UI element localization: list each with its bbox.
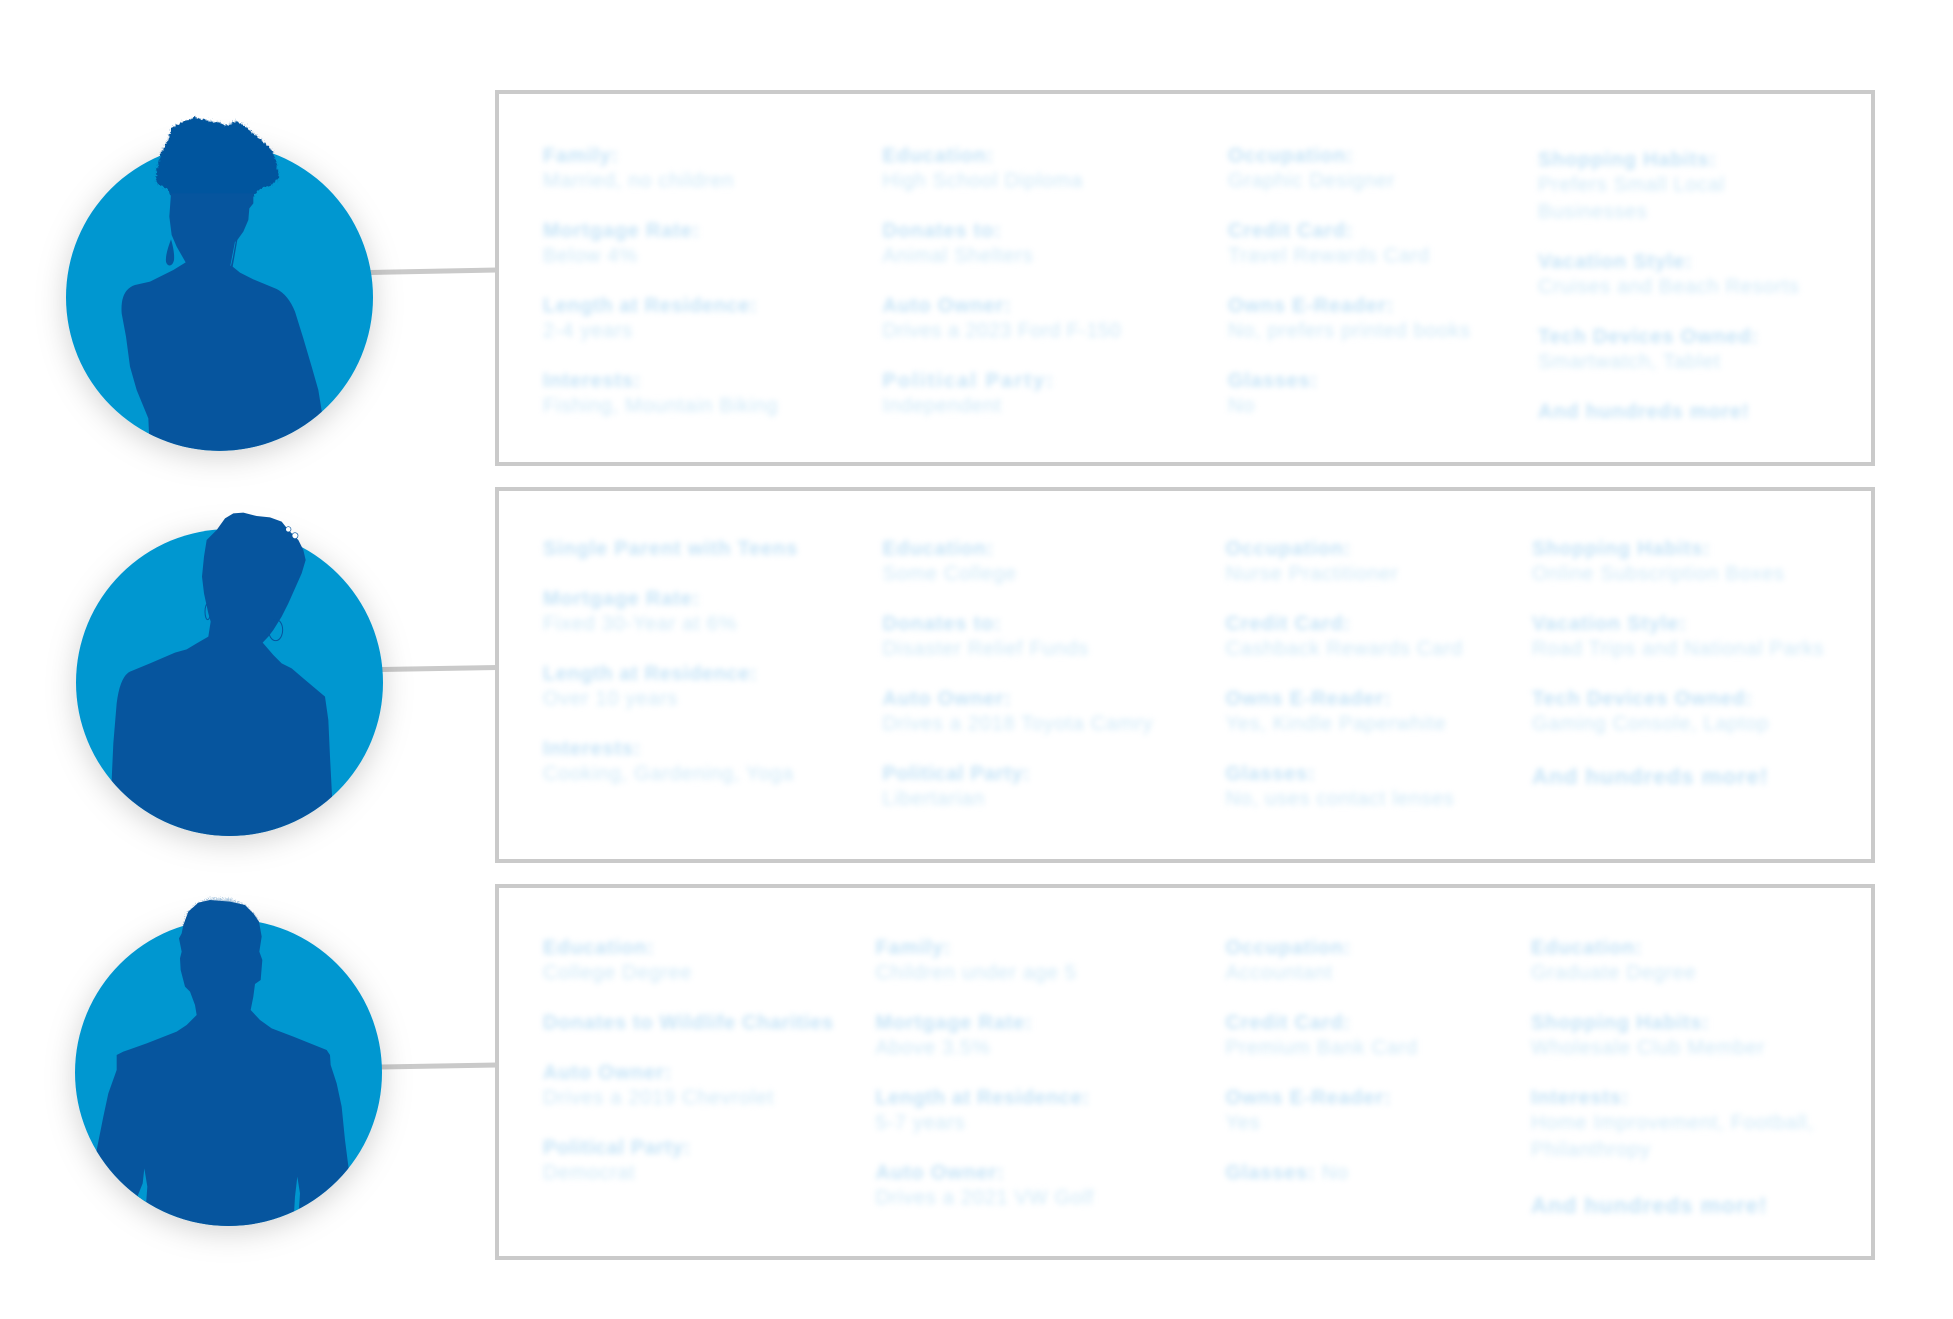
text column: profile 1 education and giving: Animal Shelters — [882, 245, 1033, 267]
text column: profile 3 household — [874, 937, 1094, 1209]
text column: profile 2 household: Cooking, Gardening, Yoga — [543, 763, 794, 785]
text column: profile 2 education and giving — [881, 538, 1153, 810]
connector line: profile 3 — [380, 1065, 497, 1067]
text column: profile 1 education and giving: Drives a 2023 Ford F-150 — [882, 320, 1121, 342]
text column: profile 1 education and giving: Auto Owner: — [882, 295, 1012, 317]
text column: profile 2 lifestyle: Road Trips and National Parks — [1532, 638, 1824, 660]
text column: profile 1 household: Below 4% — [543, 245, 638, 267]
portrait 1: woman with curly updo — [66, 117, 373, 463]
text column: profile 2 occupation: No, uses contact lenses — [1226, 788, 1454, 810]
text column: profile 1 household: Family: — [543, 145, 619, 167]
text column: profile 1 occupation: No, prefers printed books — [1228, 320, 1471, 342]
text column: profile 1 household: Married, no children — [543, 170, 734, 192]
text column: profile 1 education and giving: Education: — [882, 145, 994, 167]
text column: profile 3 lifestyle: Home Improvement, Football, — [1531, 1112, 1814, 1134]
text column: profile 3 occupation: Accountant — [1226, 962, 1333, 984]
text column: profile 3 lifestyle: Wholesale Club Member — [1531, 1037, 1765, 1059]
text column: profile 3 occupation: Premium Bank Card — [1226, 1037, 1418, 1059]
text column: profile 1 lifestyle: Shopping Habits: — [1538, 149, 1717, 171]
text column: profile 3 occupation: Owns E-Reader: — [1226, 1087, 1391, 1109]
text column: profile 1 household — [542, 145, 778, 417]
text column: profile 1 lifestyle: And hundreds more! — [1538, 401, 1749, 423]
text column: profile 2 education and giving: Some College — [882, 563, 1017, 585]
connector line: profile 1 — [370, 270, 497, 272]
text column: profile 3 education and giving: Auto Owner: — [543, 1062, 672, 1084]
text column: profile 2 education and giving: Education: — [882, 538, 994, 560]
text column: profile 3 occupation: Glasses: No — [1226, 1162, 1349, 1184]
text column: profile 2 occupation — [1224, 538, 1463, 810]
text column: profile 2 household: Fixed 30-Year at 6% — [543, 613, 737, 635]
text column: profile 2 household: Interests: — [543, 738, 641, 760]
text column: profile 2 lifestyle: Tech Devices Owned: — [1532, 688, 1753, 710]
text column: profile 3 education and giving: Donates to Wildlife Charities — [543, 1012, 834, 1034]
text column: profile 2 occupation: Nurse Practitioner — [1226, 563, 1399, 585]
text column: profile 3 occupation: Yes — [1226, 1112, 1260, 1134]
text column: profile 3 household: Children under age 5 — [876, 962, 1077, 984]
text column: profile 3 education and giving — [542, 937, 834, 1184]
text column: profile 2 occupation: Glasses: — [1226, 763, 1315, 785]
text column: profile 3 household: Length at Residence: — [876, 1087, 1090, 1109]
text column: profile 2 occupation: Yes, Kindle Paperwhite — [1226, 713, 1446, 735]
text column: profile 3 lifestyle: Shopping Habits: — [1531, 1012, 1710, 1034]
text column: profile 2 occupation: Credit Card: — [1226, 613, 1351, 635]
text column: profile 3 lifestyle: Philanthropy — [1531, 1139, 1651, 1161]
text column: profile 3 household: 5-7 years — [876, 1112, 965, 1134]
text column: profile 1 education and giving: Independent — [882, 395, 1002, 417]
text column: profile 2 education and giving: Auto Owner: — [882, 688, 1012, 710]
text column: profile 2 education and giving: Donates to: — [882, 613, 1002, 635]
text column: profile 1 occupation: Travel Rewards Card — [1228, 245, 1430, 267]
text column: profile 2 lifestyle: And hundreds more! — [1532, 764, 1768, 789]
text column: profile 3 lifestyle: Graduate Degree — [1531, 962, 1696, 984]
text column: profile 3 household: Above 3.5% — [876, 1037, 991, 1059]
text column: profile 1 occupation: No — [1228, 395, 1255, 417]
text column: profile 1 household: Mortgage Rate: — [543, 220, 700, 242]
text column: profile 2 occupation: Owns E-Reader: — [1226, 688, 1391, 710]
text column: profile 2 occupation: Cashback Rewards Card — [1226, 638, 1463, 660]
text column: profile 1 household: Fishing, Mountain Biking — [543, 395, 778, 417]
text column: profile 3 education and giving: Democrat — [543, 1162, 635, 1184]
portrait 3: man in suit jacket — [75, 898, 382, 1253]
text column: profile 2 household: Length at Residence: — [543, 663, 757, 685]
text column: profile 1 education and giving: Political Party: — [882, 370, 1055, 392]
text column: profile 1 occupation: Owns E-Reader: — [1228, 295, 1394, 317]
text column: profile 3 household: Auto Owner: — [876, 1162, 1005, 1184]
text column: profile 2 education and giving: Drives a 2018 Toyota Camry — [882, 713, 1153, 735]
text column: profile 1 lifestyle: Tech Devices Owned: — [1538, 326, 1759, 348]
text column: profile 1 lifestyle: Prefers Small Local — [1538, 174, 1725, 196]
text column: profile 1 education and giving: High School Diploma — [882, 170, 1083, 192]
text column: profile 1 lifestyle: Businesses — [1538, 201, 1647, 223]
text column: profile 1 lifestyle: Cruises and Beach Resorts — [1538, 276, 1799, 298]
text column: profile 3 household: Drives a 2021 VW Golf — [876, 1187, 1094, 1209]
text column: profile 1 occupation: Glasses: — [1228, 370, 1318, 392]
text column: profile 3 occupation — [1224, 937, 1418, 1184]
text column: profile 2 lifestyle — [1531, 538, 1824, 789]
text column: profile 1 education and giving — [881, 145, 1122, 417]
panel: profile 1 attributes — [495, 90, 1875, 466]
text column: profile 1 occupation: Graphic Designer — [1228, 170, 1395, 192]
text column: profile 2 education and giving: Political Party: — [882, 763, 1030, 785]
text column: profile 3 education and giving: Political Party: — [543, 1137, 691, 1159]
text column: profile 1 occupation — [1226, 145, 1471, 417]
text column: profile 2 occupation: Occupation: — [1226, 538, 1351, 560]
text column: profile 3 lifestyle: Interests: — [1531, 1087, 1629, 1109]
text column: profile 3 education and giving: Drives a 2019 Chevrolet — [543, 1087, 774, 1109]
text column: profile 3 household: Family: — [876, 937, 951, 959]
text column: profile 1 household: Interests: — [543, 370, 641, 392]
panel: profile 3 attributes — [495, 884, 1875, 1260]
text column: profile 2 household: Over 10 years — [543, 688, 678, 710]
text column: profile 1 occupation: Occupation: — [1228, 145, 1354, 167]
text column: profile 3 education and giving: College Degree — [543, 962, 692, 984]
text column: profile 1 lifestyle — [1537, 149, 1799, 423]
text column: profile 3 lifestyle — [1530, 937, 1814, 1218]
text column: profile 3 lifestyle: And hundreds more! — [1531, 1193, 1767, 1218]
text column: profile 2 education and giving: Libertarian — [882, 788, 985, 810]
text column: profile 2 household: Single Parent with Teens — [543, 538, 798, 560]
text column: profile 1 education and giving: Donates to: — [882, 220, 1002, 242]
text column: profile 1 lifestyle: Smartwatch, Tablet — [1538, 351, 1721, 373]
text column: profile 2 lifestyle: Online Subscription Boxes — [1532, 563, 1785, 585]
text column: profile 3 occupation: Credit Card: — [1226, 1012, 1351, 1034]
text column: profile 3 lifestyle: Education: — [1531, 937, 1643, 959]
text column: profile 2 education and giving: Disaster Relief Funds — [882, 638, 1089, 660]
text column: profile 1 lifestyle: Vacation Style: — [1538, 251, 1693, 273]
portrait 2: woman with short hair and hoop earring — [76, 513, 383, 863]
text column: profile 2 household: Mortgage Rate: — [543, 588, 700, 610]
text column: profile 1 household: 2-4 years — [543, 320, 633, 342]
text column: profile 2 lifestyle: Vacation Style: — [1532, 613, 1687, 635]
text column: profile 2 lifestyle: Gaming Console, Laptop — [1532, 713, 1769, 735]
panel: profile 2 attributes — [495, 487, 1875, 863]
text column: profile 2 lifestyle: Shopping Habits: — [1532, 538, 1711, 560]
text column: profile 3 occupation: Occupation: — [1226, 937, 1351, 959]
connector line: profile 2 — [381, 668, 497, 670]
text column: profile 1 household: Length at Residence: — [543, 295, 757, 317]
text column: profile 3 household: Mortgage Rate: — [876, 1012, 1033, 1034]
text column: profile 2 household — [542, 538, 798, 785]
text column: profile 1 occupation: Credit Card: — [1228, 220, 1353, 242]
text column: profile 3 education and giving: Education: — [543, 937, 655, 959]
